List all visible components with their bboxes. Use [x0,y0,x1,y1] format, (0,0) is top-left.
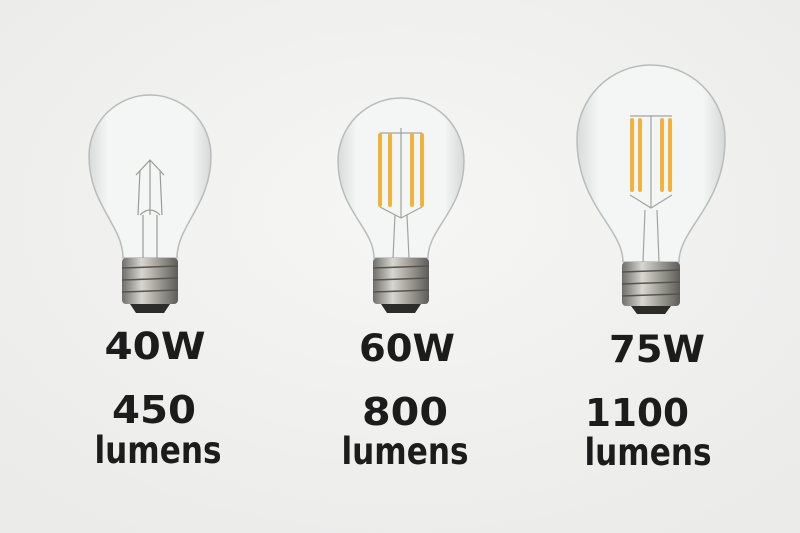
label: 40W 450 lumens: 450 [112,388,196,432]
label: 75W 1100 lumens: 1100 [585,391,689,435]
label: 60W 800 lumens [342,327,468,473]
label: 40W 450 lumens: lumens [94,429,222,472]
bulb 3: 75W filament [577,65,725,314]
label: 60W 800 lumens: lumens [342,430,468,473]
label: 75W 1100 lumens: 75W [609,328,705,371]
label: 40W 450 lumens [94,325,222,472]
label: 60W 800 lumens: 800 [362,390,448,434]
label: 60W 800 lumens: 60W [359,327,455,370]
label: 40W 450 lumens: 40W [104,325,206,368]
label: 75W 1100 lumens [584,328,712,474]
bulb 1: 40W incandescent [89,95,211,313]
bulb 2: 60W filament [338,98,464,313]
label: 75W 1100 lumens: lumens [584,431,712,474]
